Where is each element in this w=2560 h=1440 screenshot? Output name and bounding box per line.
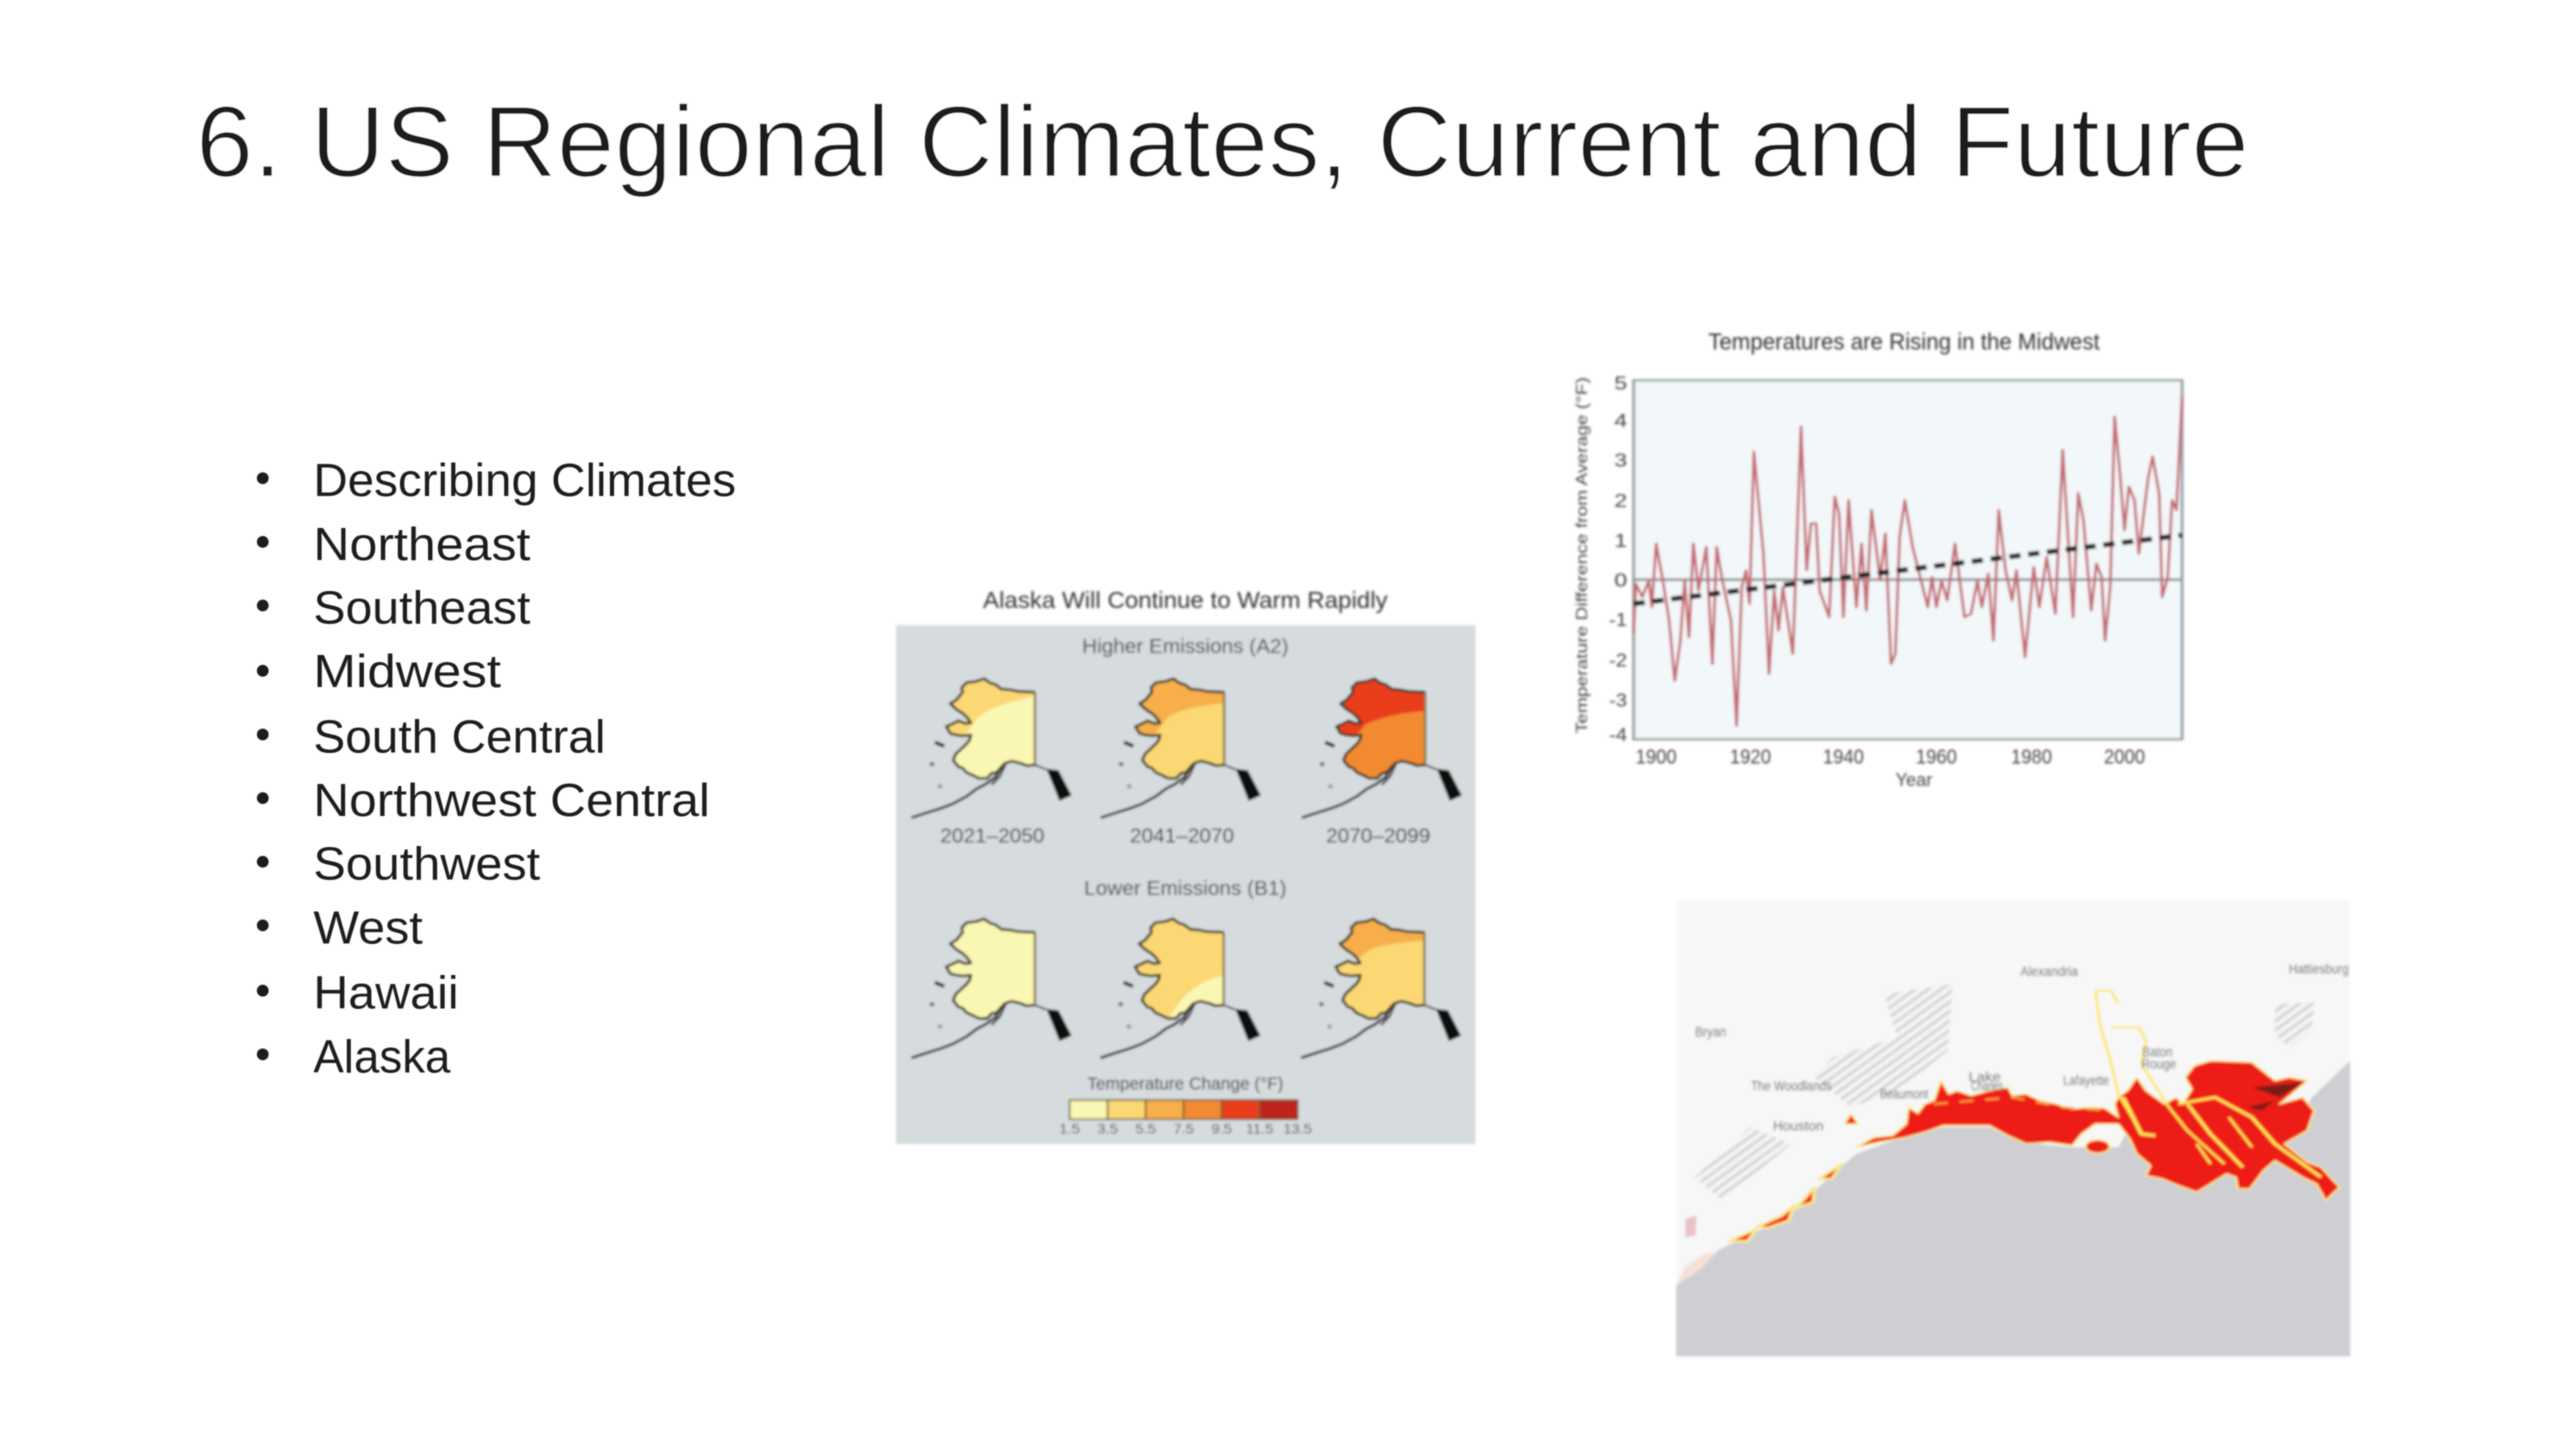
yellow flood channels (1934, 991, 2321, 1177)
y axis labels: -4 (1609, 724, 1627, 745)
place names: Hattiesburg (2289, 961, 2349, 977)
panel: Alaska warming maps: 2041–2070 (1130, 824, 1234, 847)
bulleted list of regions: Hawaii (313, 967, 459, 1019)
x axis labels: Year (1896, 769, 1932, 790)
y axis labels: 4 (1614, 410, 1627, 431)
hatched areas (1695, 984, 2314, 1201)
y axis labels: 2 (1614, 489, 1627, 511)
legend: temperature change: 11.5 (1246, 1122, 1274, 1137)
bulleted list of regions (257, 454, 736, 1082)
map: B1 2041-2070 (1100, 919, 1261, 1058)
x axis labels: 1980 (2011, 746, 2052, 769)
y axis labels (1609, 372, 1627, 745)
legend: temperature change (1059, 1074, 1312, 1137)
place names: Charles (1971, 1078, 2003, 1094)
place names: Beaumont (1880, 1086, 1929, 1102)
panel: Alaska warming maps (896, 588, 1475, 1144)
y axis labels: 3 (1614, 449, 1627, 471)
legend: temperature change: 1.5 (1059, 1122, 1080, 1137)
bulleted list of regions: Describing Climates (313, 454, 736, 506)
chart: Midwest temperature line chart (1573, 329, 2182, 790)
zero line (1634, 576, 2182, 584)
map: A2 2021-2050 (912, 673, 1072, 818)
panel: Alaska warming maps: 2070–2099 (1326, 824, 1430, 847)
title: 6. US Regional Climates, Current and Future (196, 85, 2249, 198)
place names: Rouge (2142, 1056, 2176, 1072)
dark wetlands (2247, 1082, 2303, 1111)
panel: Alaska warming maps: Higher Emissions (A2) (1082, 636, 1288, 658)
bulleted list of regions: South Central (313, 710, 605, 762)
x axis labels: 1940 (1823, 746, 1864, 769)
x axis labels: 1920 (1730, 746, 1771, 769)
place names: Alexandria (2020, 963, 2078, 979)
y axis labels: -3 (1609, 689, 1627, 711)
coast pale patches (1676, 1216, 1718, 1285)
place names (1695, 961, 2349, 1134)
legend: temperature change: 13.5 (1283, 1122, 1312, 1137)
legend: temperature change: 7.5 (1173, 1122, 1194, 1137)
bulleted list of regions: Northwest Central (313, 774, 710, 826)
map: A2 2041-2070 (1101, 673, 1261, 818)
legend: temperature change: 5.5 (1135, 1122, 1156, 1137)
bulleted list of regions: Southeast (313, 581, 530, 633)
place names: Houston (1773, 1118, 1824, 1134)
legend: temperature change: 9.5 (1211, 1122, 1232, 1137)
place names: The Woodlands (1751, 1078, 1832, 1094)
y axis labels: 1 (1614, 530, 1627, 551)
panel: Alaska warming maps: 2021–2050 (940, 824, 1045, 847)
map: B1 2070-2099 (1301, 913, 1461, 1058)
place names: Lake (1969, 1069, 2001, 1085)
flood extent (1729, 1061, 2340, 1241)
panel: Alaska warming maps: Lower Emissions (B1) (1084, 878, 1286, 900)
x axis labels: 2000 (2104, 746, 2145, 769)
x axis labels: 1900 (1636, 746, 1677, 769)
map: A2 2070-2099 (1302, 673, 1462, 818)
chart title: Temperatures are Rising in the Midwest (1708, 329, 2100, 355)
legend: temperature change: 3.5 (1097, 1122, 1118, 1137)
place names: Bryan (1695, 1024, 1726, 1040)
bulleted list of regions: Midwest (313, 645, 501, 697)
map: B1 2021-2050 (912, 919, 1072, 1058)
dashed trend line (1634, 535, 2182, 604)
place names: Baton (2143, 1044, 2173, 1060)
x axis labels (1636, 746, 2145, 790)
y axis title: Temperature Difference from Average (°F) (1573, 377, 1590, 733)
map: Gulf Coast sea level rise (1676, 901, 2350, 1356)
temperature series (1634, 396, 2182, 726)
x axis labels: 1960 (1916, 746, 1957, 769)
bulleted list of regions: Southwest (313, 838, 540, 890)
y axis labels: -1 (1609, 609, 1627, 631)
y axis labels: 0 (1614, 569, 1627, 591)
place names: Lafayette (2063, 1073, 2109, 1088)
bulleted list of regions: Northeast (313, 518, 530, 570)
legend: temperature change: Temperature Change (°F) (1087, 1074, 1283, 1094)
y axis labels: -2 (1609, 649, 1627, 671)
bulleted list of regions: West (313, 901, 423, 953)
gulf water (1676, 1061, 2350, 1356)
y axis labels: 5 (1614, 372, 1627, 394)
bulleted list of regions: Alaska (313, 1030, 451, 1082)
panel: Alaska warming maps: Alaska Will Continue to Warm Rapidly (983, 588, 1388, 614)
